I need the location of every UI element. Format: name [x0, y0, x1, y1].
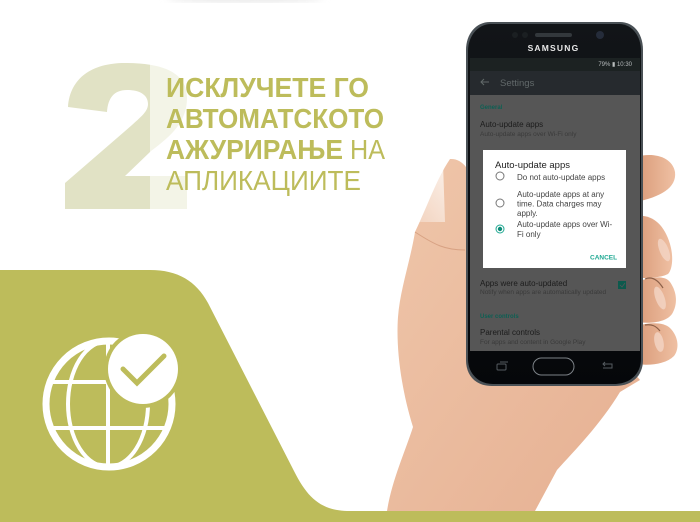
option: do not update: Do not auto-update apps: [517, 173, 605, 182]
large numeral 2: [65, 63, 187, 209]
settings group: user controls: For apps and content in Google Play: [480, 339, 586, 346]
option: wifi only selected: [496, 220, 612, 239]
smartphone: [466, 22, 643, 386]
fingers: [636, 155, 677, 365]
hand palm and thumb: [387, 159, 640, 511]
option: wifi only selected: Fi only: [517, 230, 541, 239]
settings group: user controls: User controls: [480, 314, 519, 320]
phone body: [466, 22, 643, 386]
settings group: general: [480, 105, 577, 138]
heading: ИСКЛУЧЕТЕ ГО: [166, 72, 369, 103]
option: any time: [496, 190, 604, 218]
icon: globe with check badge: [46, 330, 182, 467]
numeral 2 left part: [65, 63, 150, 209]
settings group: general: Auto-update apps over Wi-Fi only: [480, 131, 577, 138]
settings group: notifications: Apps were auto-updated: [480, 279, 567, 288]
settings group: general: Auto-update apps: [480, 120, 543, 129]
phone screen: [470, 58, 640, 351]
dialog: [483, 150, 626, 268]
cancel button: CANCEL: [590, 254, 617, 262]
top shadow fragment: [167, 0, 323, 2]
dialog title: Auto-update apps: [495, 160, 570, 171]
check badge: [108, 334, 178, 404]
status bar: [470, 58, 640, 71]
heading: [166, 72, 386, 196]
option: wifi only selected: Auto-update apps over Wi-: [517, 220, 612, 229]
settings list background: [470, 95, 640, 351]
nails and creases: [652, 237, 673, 353]
option: any time: Auto-update apps at any: [517, 190, 604, 199]
white wedge over thumb: [403, 163, 445, 222]
heading: АЖУРИРАЊЕ: [166, 134, 343, 165]
back arrow: [481, 79, 489, 85]
app bar title: Settings: [500, 78, 535, 89]
heading: АПЛИКАЦИИТЕ: [166, 165, 361, 196]
bottom bezel buttons: [497, 358, 612, 375]
status text: 79% ▮ 10:30: [598, 62, 633, 68]
settings group: notifications: Notify when apps are automatically updated: [480, 289, 606, 296]
settings group: general: General: [480, 105, 503, 111]
brand label: SAMSUNG: [528, 43, 579, 53]
option: any time: apply.: [517, 209, 538, 218]
settings group: notifications: [480, 279, 626, 296]
settings group: user controls: Parental controls: [480, 328, 540, 337]
earpiece and camera: [535, 33, 572, 37]
heading: НА: [350, 134, 386, 165]
option: any time: time. Data charges may: [517, 200, 601, 208]
app bar: [470, 71, 640, 95]
settings group: user controls: [480, 314, 586, 346]
hand holding phone: [387, 155, 677, 511]
green corner panel: [0, 270, 700, 522]
numeral 2 right part: [150, 64, 187, 209]
heading: АВТОМАТСКОТО: [166, 103, 384, 134]
